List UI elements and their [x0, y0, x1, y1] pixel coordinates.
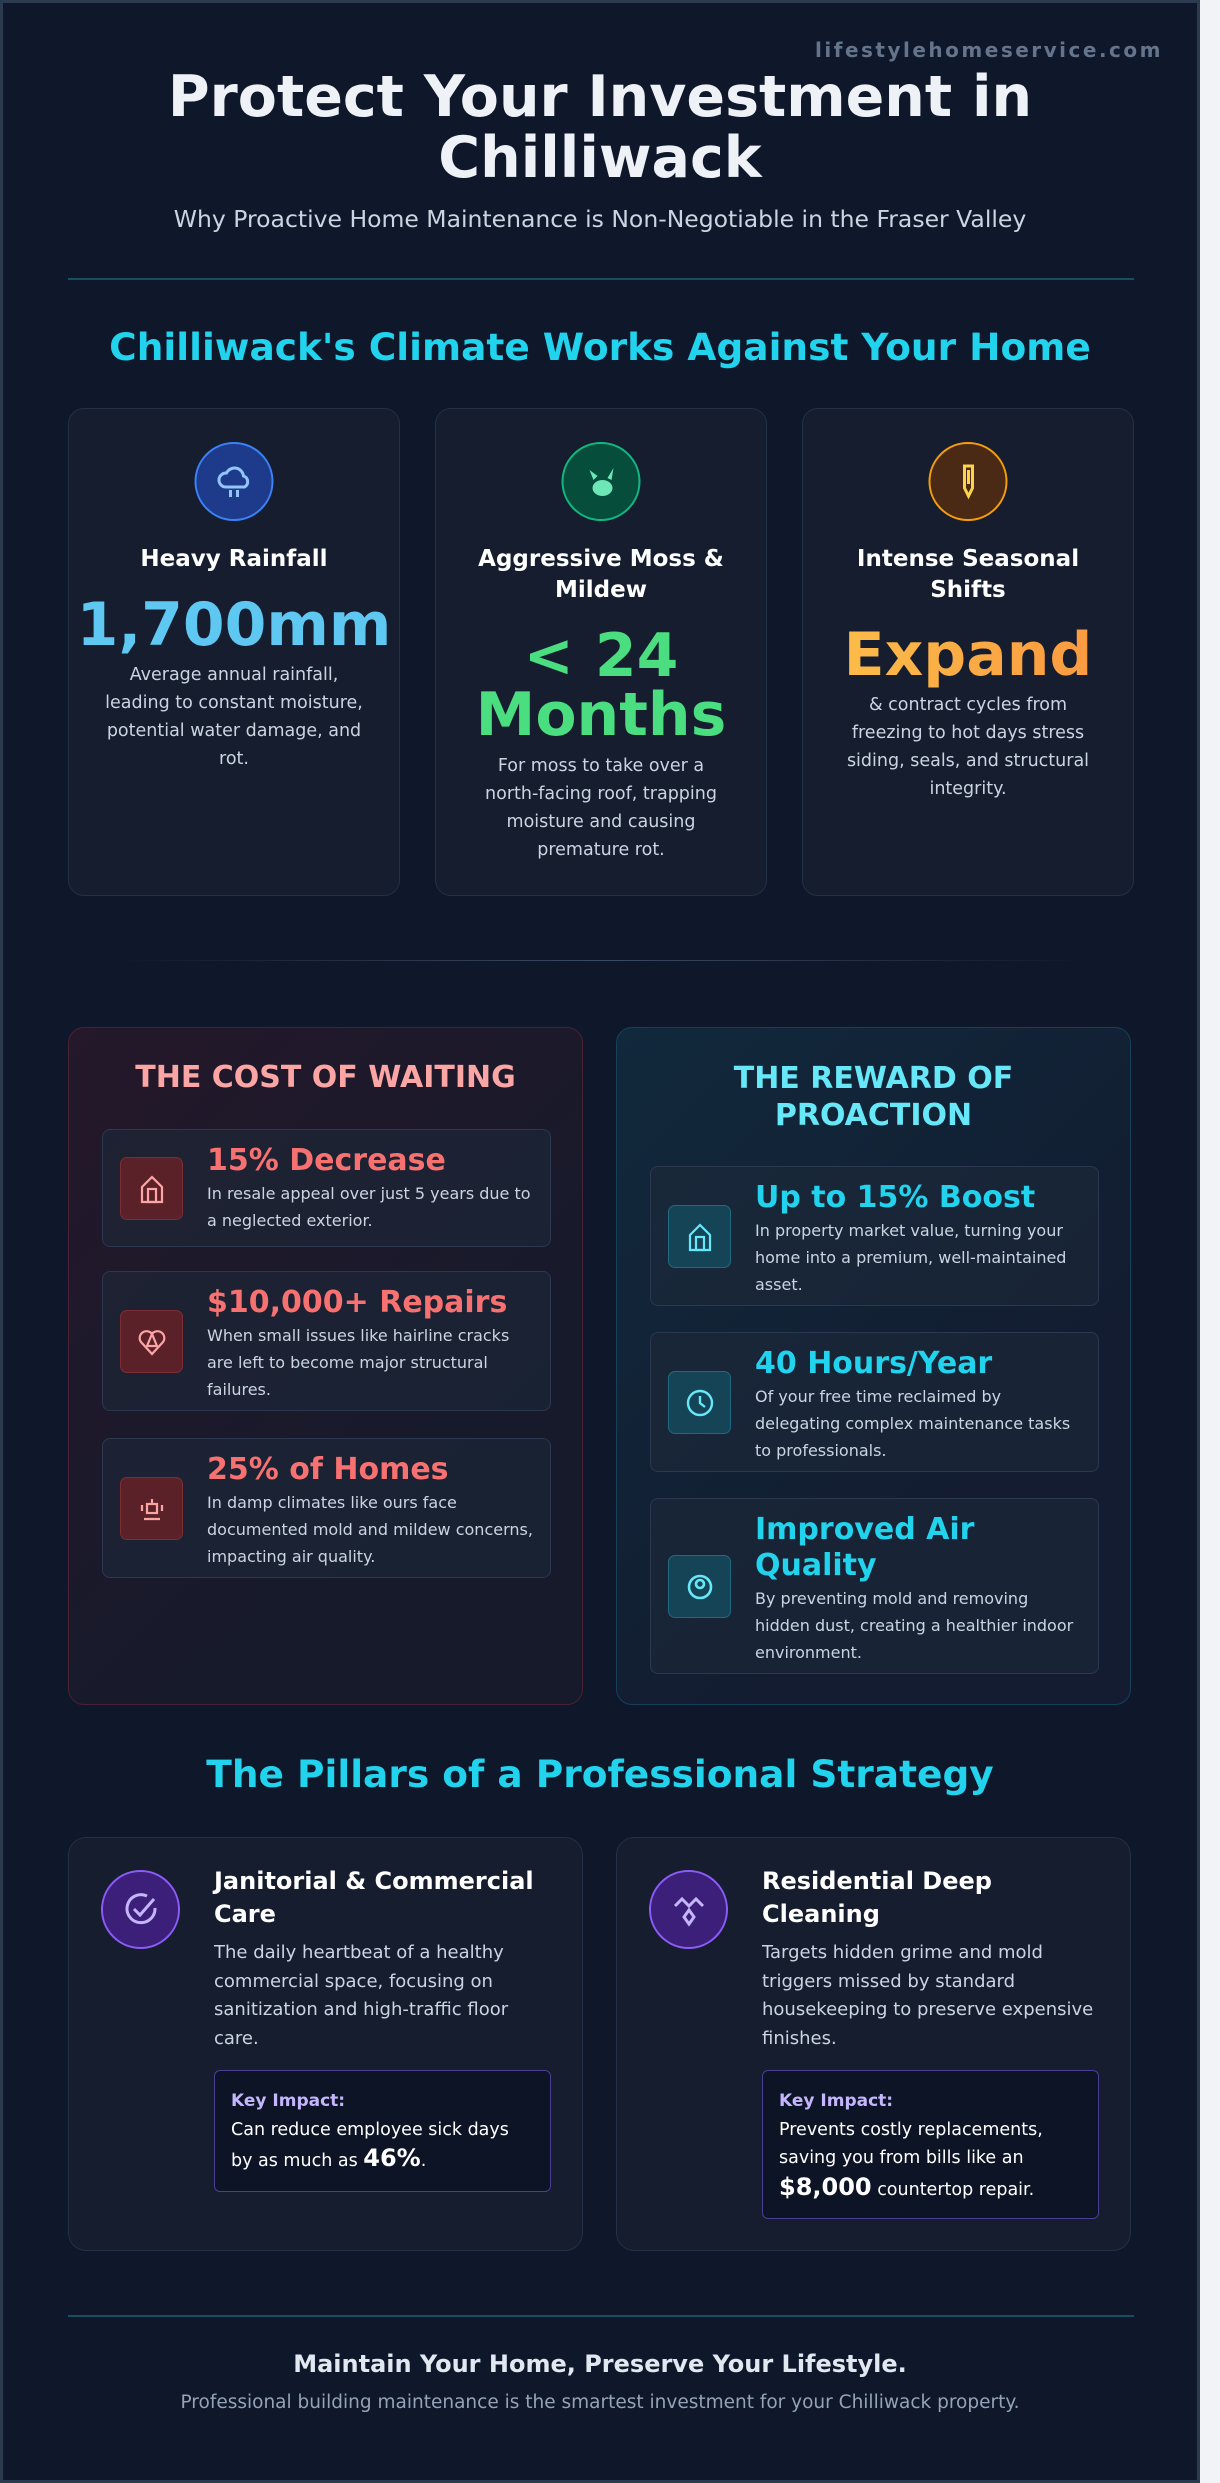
- heading: THE REWARD OF: [734, 1061, 1013, 1096]
- item: boost: In property market value, turning your home into a premium, well-maintained asset.: [755, 1221, 1066, 1294]
- item: repairs: [102, 1271, 551, 1411]
- pillar: janitorial: The daily heartbeat of a healthy commercial space, focusing on sanitization and high-traffic floor care.: [214, 1942, 508, 2048]
- key impact: Key Impact:: [231, 2091, 345, 2111]
- pillar: residential: Residential Deep Cleaning: [762, 1867, 992, 1928]
- footer text: Professional building maintenance is the smartest investment for your Chilliwack property.: [180, 2392, 1020, 2413]
- card: heavy rainfall: [68, 408, 400, 896]
- key impact: [214, 2070, 551, 2192]
- icon: check circle: [101, 1870, 180, 1949]
- stat: [476, 621, 726, 750]
- title: Chilliwack: [438, 125, 762, 191]
- key impact: Can reduce employee sick days by as much as 46%.: [231, 2120, 509, 2172]
- pillar: janitorial: Janitorial & Commercial Care: [214, 1867, 534, 1928]
- key impact: [762, 2070, 1099, 2219]
- item: 40 hours: Of your free time reclaimed by delegating complex maintenance tasks to professionals.: [755, 1387, 1070, 1460]
- item: air quality: Improved Air: [755, 1512, 974, 1547]
- stat: Expand: [844, 620, 1092, 690]
- stat: 1,700mm: [77, 590, 391, 660]
- section heading: climate: Chilliwack's Climate Works Against Your Home: [109, 325, 1091, 369]
- card: moss: For moss to take over a north-facing roof, trapping moisture and causing premature rot.: [485, 756, 717, 860]
- footer title: Maintain Your Home, Preserve Your Lifestyle.: [293, 2350, 907, 2378]
- title: [168, 64, 1032, 191]
- item: 15% decrease: [102, 1129, 551, 1247]
- card: moss: Aggressive Moss &: [478, 546, 724, 572]
- item: 15% decrease: 15% Decrease: [207, 1143, 446, 1178]
- pillar: janitorial: [68, 1837, 583, 2251]
- icon: cloud rain: [194, 442, 274, 521]
- item: repairs: When small issues like hairline cracks are left to become major structural failures.: [207, 1326, 509, 1399]
- item: air quality: By preventing mold and removing hidden dust, creating a healthier indoor environment.: [755, 1589, 1073, 1662]
- watermark: lifestylehomeservice.com: [815, 38, 1163, 62]
- heading: THE COST OF WAITING: [135, 1060, 516, 1095]
- card: moss: [435, 408, 767, 896]
- stat: Months: [476, 680, 726, 750]
- item: 25% of homes: In damp climates like ours face documented mold and mildew concerns, impacting air quality.: [207, 1493, 533, 1566]
- panel: reward of proaction: [616, 1027, 1131, 1705]
- subtitle: Why Proactive Home Maintenance is Non-Negotiable in the Fraser Valley: [174, 205, 1026, 233]
- key impact: Key Impact:: [779, 2091, 893, 2111]
- card: seasonal shifts: Intense Seasonal: [857, 546, 1079, 572]
- card: moss: Mildew: [555, 577, 647, 603]
- card: heavy rainfall: Average annual rainfall, leading to constant moisture, potential water damage, and rot.: [105, 665, 363, 769]
- icon: thermometer: [928, 442, 1008, 521]
- heading: [734, 1061, 1013, 1133]
- icon: moss: [562, 442, 640, 521]
- icon: gem: [649, 1870, 728, 1949]
- stat: < 24: [524, 621, 678, 691]
- card: heavy rainfall: Heavy Rainfall: [140, 546, 328, 572]
- item: 25% of homes: 25% of Homes: [207, 1452, 449, 1487]
- panel: cost of waiting: [68, 1027, 583, 1705]
- card: seasonal shifts: Shifts: [930, 577, 1006, 603]
- key impact: Prevents costly replacements, saving you from bills like an $8,000 countertop repair.: [779, 2120, 1043, 2200]
- pillar: residential: Targets hidden grime and mold triggers missed by standard housekeeping to preserve expensive finishes.: [762, 1942, 1093, 2048]
- item: air quality: [650, 1498, 1099, 1674]
- item: air quality: Quality: [755, 1548, 877, 1583]
- item: 25% of homes: [102, 1438, 551, 1578]
- heading: PROACTION: [775, 1098, 972, 1133]
- pillar: residential: [616, 1837, 1131, 2251]
- title: Protect Your Investment in: [168, 64, 1032, 130]
- item: 15% decrease: In resale appeal over just 5 years due to a neglected exterior.: [207, 1184, 531, 1230]
- section heading: pillars: The Pillars of a Professional Strategy: [206, 1752, 994, 1796]
- item: 40 hours: 40 Hours/Year: [755, 1346, 992, 1381]
- item: repairs: $10,000+ Repairs: [207, 1285, 507, 1320]
- card: seasonal shifts: [802, 408, 1134, 896]
- item: boost: Up to 15% Boost: [755, 1180, 1035, 1215]
- item: boost: [650, 1166, 1099, 1306]
- item: 40 hours: [650, 1332, 1099, 1472]
- card: seasonal shifts: & contract cycles from freezing to hot days stress siding, seals, and structural integrity.: [847, 695, 1089, 799]
